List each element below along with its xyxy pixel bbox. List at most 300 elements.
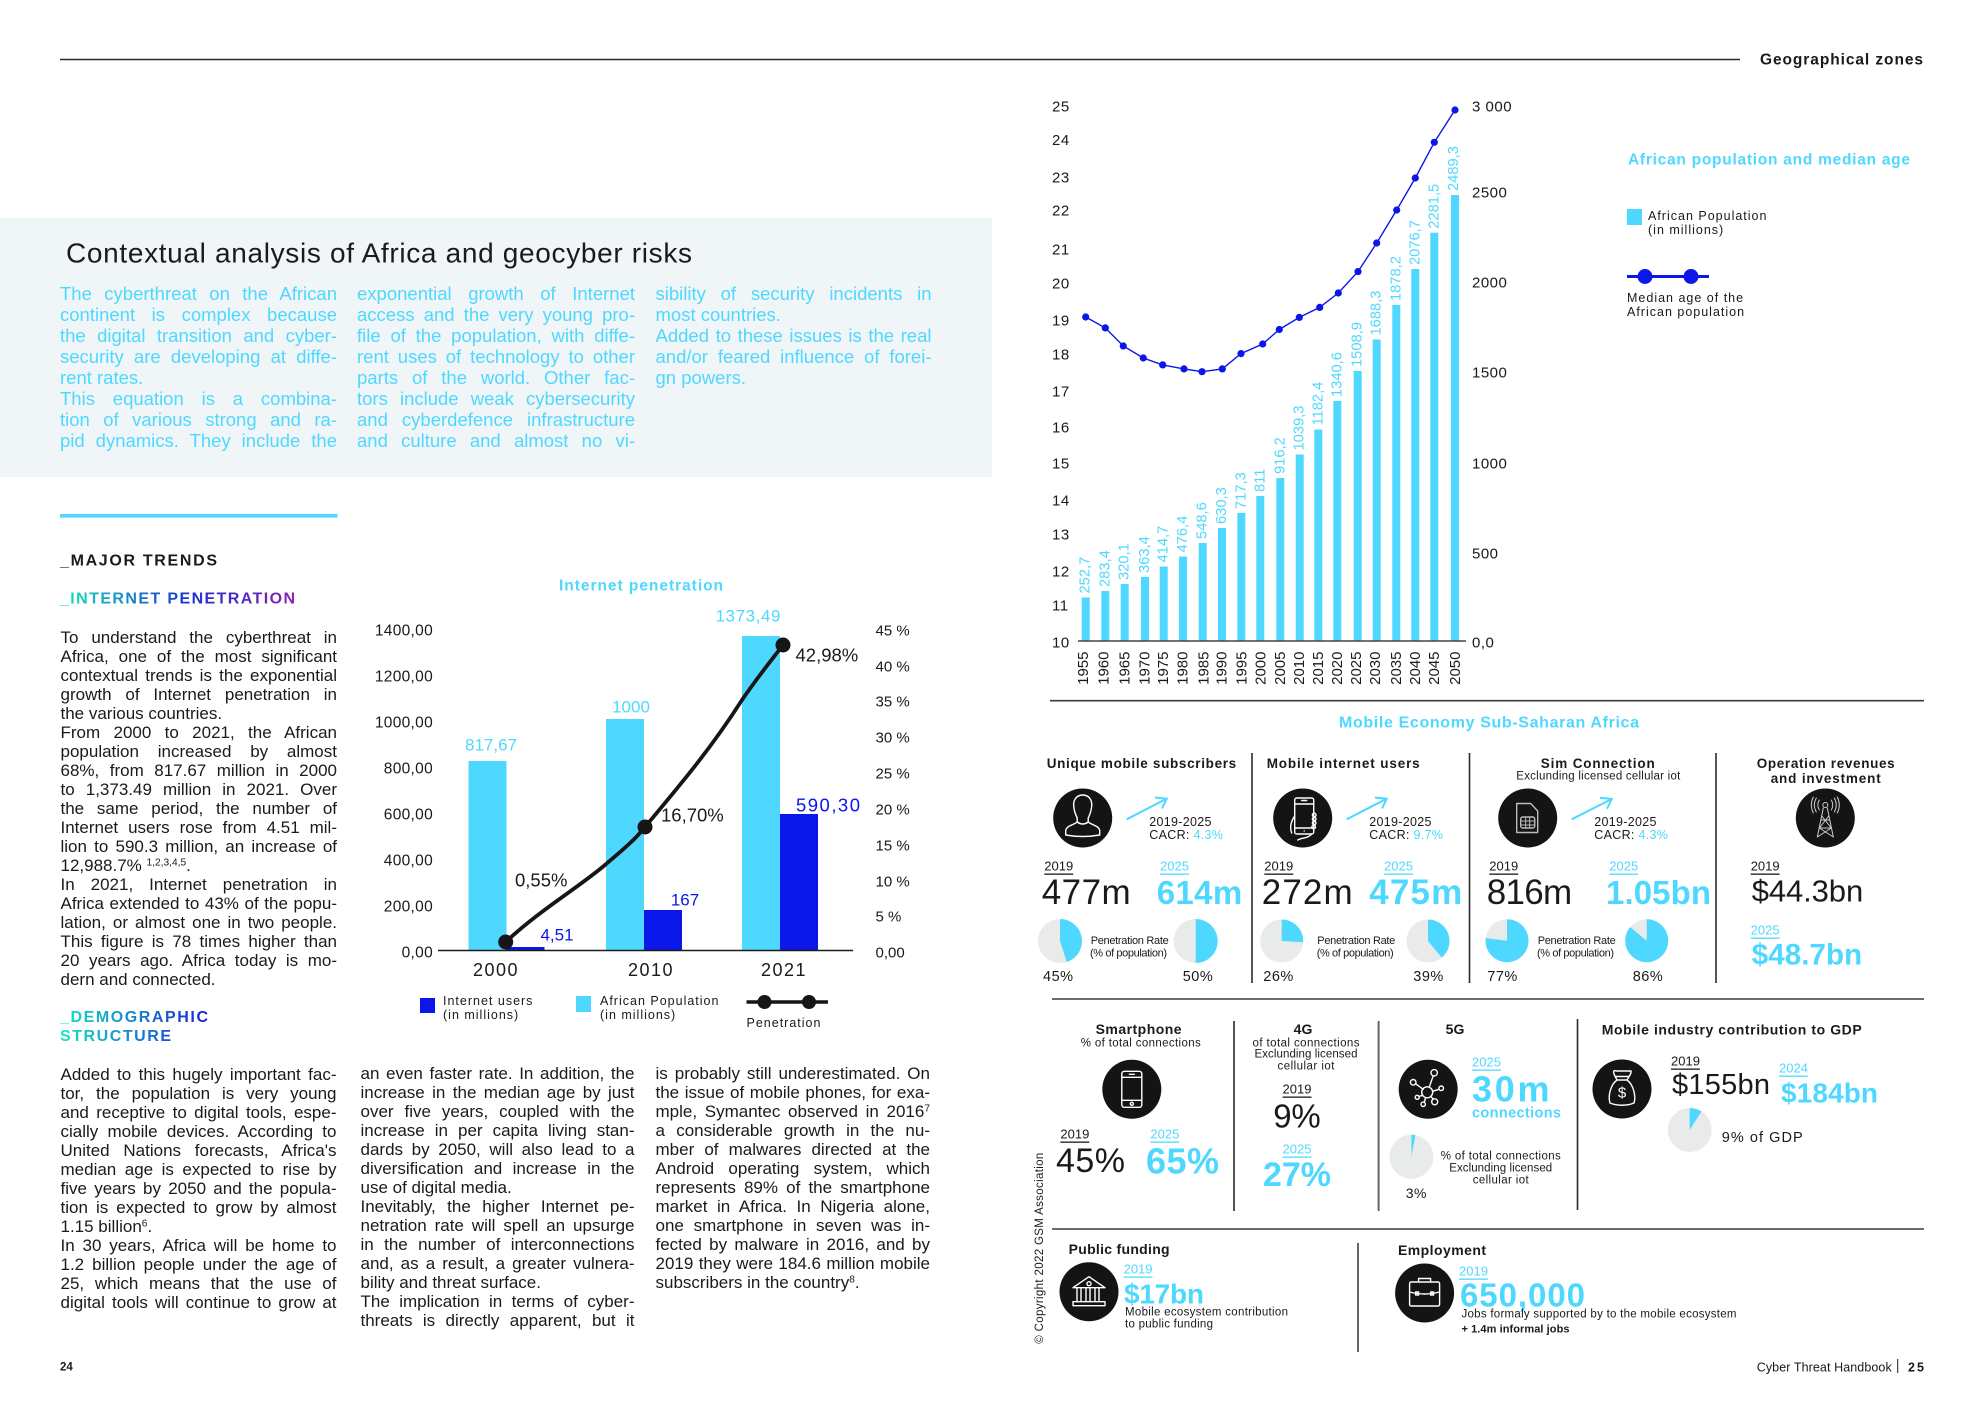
intro text column 2: rent uses of technology to other bbox=[357, 346, 635, 366]
right axis labels: 35 % bbox=[876, 694, 910, 710]
intro text column 2: tors include weak cybersecurity bbox=[357, 388, 635, 408]
panel: mobile internet users: (% of population) bbox=[1317, 948, 1394, 960]
text block: internet penetration: to 1,373.49 million in 2021. Over bbox=[60, 780, 337, 799]
legend bbox=[420, 994, 828, 1030]
footer: right page label: Cyber Threat Handbook bbox=[1757, 1361, 1892, 1375]
population value labels: 363,4 bbox=[1137, 536, 1153, 573]
chart legend: population and median age: African Population bbox=[1648, 209, 1767, 223]
panel: sim connection: (% of population) bbox=[1537, 948, 1614, 960]
panel: unique mobile subscribers: 477m bbox=[1042, 873, 1131, 912]
panel: public funding: Mobile ecosystem contribution bbox=[1125, 1306, 1288, 1318]
text block: demographic column 3: a considerable growth in the nu- bbox=[656, 1120, 930, 1140]
bar value labels: 1000 bbox=[612, 698, 650, 716]
left axis labels: 0,00 bbox=[402, 944, 433, 962]
population bars bbox=[1082, 195, 1459, 641]
year labels: 1955 bbox=[1075, 652, 1092, 685]
text block: demographic column 1: five years by 2050 and the popula- bbox=[60, 1179, 336, 1198]
left axis: median age: 16 bbox=[1052, 420, 1070, 436]
panel: 5G: % of total connections bbox=[1441, 1150, 1561, 1162]
text block: internet penetration: lation, or almost one in two people. bbox=[60, 913, 337, 932]
text block: demographic column 1: cially mobile devices. According to bbox=[60, 1122, 336, 1141]
year labels: 1995 bbox=[1234, 652, 1250, 685]
intro text column 1: pid dynamics. They include the bbox=[60, 430, 337, 450]
x axis labels bbox=[473, 960, 807, 980]
panel: sim connection: CACR: 4.3% bbox=[1594, 828, 1668, 842]
panel: 4G: 27% bbox=[1263, 1156, 1331, 1194]
section rules bbox=[1050, 701, 1924, 1229]
copyright: © Copyright 2022 GSM Association bbox=[1034, 1153, 1046, 1344]
bars: African population bbox=[468, 636, 780, 950]
panel: operation revenues and investment: 2019 bbox=[1751, 858, 1780, 874]
accent bar bbox=[60, 514, 338, 518]
chart legend: population and median age: Median age of the bbox=[1627, 291, 1744, 305]
panel: smartphone: % of total connections bbox=[1081, 1038, 1201, 1050]
pie: 77% bbox=[1486, 919, 1528, 962]
right axis: population: 0,0 bbox=[1472, 634, 1494, 652]
year labels: 1960 bbox=[1096, 652, 1112, 685]
x axis labels: 2000 bbox=[473, 960, 519, 980]
panel: mobile internet users: 475m bbox=[1369, 873, 1462, 912]
panel: mobile internet users: CACR: 9.7% bbox=[1369, 828, 1443, 842]
intro text column 3: Added to these issues is the real bbox=[656, 324, 932, 346]
panel: sim connection: Sim Connection bbox=[1541, 756, 1655, 771]
text block: demographic column 1 bbox=[60, 1065, 336, 1312]
x axis labels: 2021 bbox=[761, 960, 807, 980]
panel: mobile industry contribution to GDP: 2019 bbox=[1671, 1054, 1700, 1068]
heading: major trends: _MAJOR TRENDS bbox=[59, 552, 217, 570]
left axis: median age: 25 bbox=[1052, 98, 1070, 116]
chart legend: population and median age: African population bbox=[1627, 305, 1745, 319]
legend: (in millions) bbox=[443, 1008, 519, 1022]
text block: demographic column 3: subscribers in the country8. bbox=[656, 1272, 860, 1292]
panel: unique mobile subscribers: 45% bbox=[1043, 969, 1074, 985]
population value labels: 2281,5 bbox=[1426, 184, 1442, 229]
text block: demographic column 3: market in Africa. In Nigeria alone, bbox=[656, 1196, 930, 1216]
year labels: 2025 bbox=[1348, 652, 1365, 685]
panel: employment: 650,000 bbox=[1460, 1276, 1585, 1314]
text block: internet penetration: dern and connected. bbox=[60, 970, 216, 989]
panel: sim connection: 1.05bn bbox=[1606, 874, 1711, 911]
pie: 50% bbox=[1174, 919, 1218, 963]
axis baseline bbox=[1078, 640, 1466, 642]
panel: mobile internet users: Penetration Rate bbox=[1317, 935, 1395, 947]
bars: internet users bbox=[506, 814, 818, 950]
text block: demographic column 3: represents 89% of the smartphone bbox=[656, 1178, 930, 1196]
right axis: population: 2500 bbox=[1472, 184, 1507, 202]
panel: mobile internet users: Mobile internet users bbox=[1267, 756, 1420, 771]
left axis: median age: 20 bbox=[1052, 276, 1070, 292]
right axis labels: 5 % bbox=[876, 908, 901, 926]
year labels: 1965 bbox=[1116, 652, 1134, 685]
chart legend: population and median age bbox=[1627, 152, 1910, 319]
year labels: 1985 bbox=[1196, 652, 1212, 685]
panel: 5G: 3% bbox=[1406, 1185, 1427, 1201]
panel: smartphone: Smartphone bbox=[1096, 1021, 1182, 1037]
panel: 4G: Exclunding licensed bbox=[1254, 1048, 1358, 1060]
intro text column 2: exponential growth of Internet bbox=[357, 282, 635, 304]
chart: internet penetration bbox=[375, 578, 910, 1030]
panel: unique mobile subscribers: 2019 bbox=[1044, 858, 1073, 874]
intro text column 2: file of the population, with diffe- bbox=[357, 324, 635, 346]
panel: smartphone: 2019 bbox=[1060, 1126, 1089, 1142]
left axis labels: 1000,00 bbox=[375, 714, 433, 732]
right axis labels: 15 % bbox=[876, 838, 910, 854]
footer: left page number: 24 bbox=[60, 1362, 73, 1374]
text block: demographic column 3: mber of malwares directed at the bbox=[656, 1140, 930, 1158]
text block: internet penetration: population increased by almost bbox=[60, 742, 337, 761]
penetration labels bbox=[515, 644, 858, 890]
panel: unique mobile subscribers: 2019-2025 bbox=[1149, 815, 1212, 829]
heading: internet penetration: _INTERNET PENETRATION bbox=[59, 590, 295, 608]
intro text column 1: the digital transition and cyber- bbox=[60, 324, 337, 346]
text block: internet penetration: the various countries. bbox=[60, 704, 222, 723]
population value labels: 1878,2 bbox=[1388, 256, 1404, 301]
bar value labels bbox=[465, 606, 860, 944]
penetration labels: 42,98% bbox=[796, 644, 858, 666]
left axis: median age: 15 bbox=[1052, 456, 1070, 472]
year labels: 2000 bbox=[1252, 652, 1270, 685]
legend: Internet users bbox=[443, 994, 533, 1008]
text block: demographic column 2: diversification and increase in the bbox=[360, 1158, 634, 1178]
icon: cell tower bbox=[1796, 788, 1855, 848]
intro text column 3: most countries. bbox=[656, 304, 781, 324]
panel: mobile internet users: 272m bbox=[1262, 873, 1353, 912]
text block: internet penetration: Internet users rose from 4.51 mil- bbox=[60, 818, 337, 837]
right axis labels bbox=[876, 622, 910, 962]
year labels: 2035 bbox=[1388, 652, 1405, 685]
right axis: population: 2000 bbox=[1472, 274, 1507, 292]
population value labels: 2489,3 bbox=[1446, 146, 1462, 191]
panel: employment: 2019 bbox=[1459, 1264, 1488, 1278]
bar value labels: 4,51 bbox=[540, 926, 574, 944]
icon: bank bbox=[1060, 1262, 1118, 1321]
year labels: 1980 bbox=[1174, 652, 1192, 685]
panel: public funding: to public funding bbox=[1125, 1318, 1213, 1330]
text block: demographic column 3: fected by malware in 2016, and by bbox=[656, 1234, 930, 1254]
left axis: median age: 12 bbox=[1052, 564, 1070, 580]
text block: internet penetration: In 2021, Internet penetration in bbox=[60, 875, 337, 894]
axis baseline bbox=[438, 950, 853, 952]
panel: operation revenues and investment: $48.7bn bbox=[1752, 938, 1862, 972]
text block: demographic column 2: dards by 2050, will also lead to a bbox=[360, 1140, 634, 1158]
text block: internet penetration: To understand the cyberthreat in bbox=[60, 628, 337, 647]
intro text column 1: rent rates. bbox=[60, 366, 143, 388]
text block: internet penetration: Africa, one of the most significant bbox=[60, 647, 337, 666]
panel: operation revenues and investment bbox=[1751, 756, 1895, 972]
panel: 4G: cellular iot bbox=[1278, 1060, 1335, 1072]
text block: demographic column 2: use of digital media. bbox=[360, 1178, 512, 1196]
heading: demographic structure: _DEMOGRAPHIC bbox=[59, 1009, 208, 1026]
arrow: growth bbox=[1347, 798, 1387, 819]
penetration line bbox=[498, 638, 790, 950]
left axis: median age: 21 bbox=[1052, 242, 1070, 258]
population value labels: 1688,3 bbox=[1369, 291, 1385, 336]
year labels: 2005 bbox=[1272, 652, 1289, 685]
pie: 26% bbox=[1260, 920, 1303, 962]
intro text column 2 bbox=[357, 282, 635, 450]
left axis: median age: 18 bbox=[1052, 346, 1070, 364]
intro text column 1: tion of various strong and ra- bbox=[60, 408, 337, 430]
panel: mobile industry contribution to GDP: $184bn bbox=[1781, 1078, 1878, 1108]
year labels bbox=[1075, 652, 1464, 685]
text block: internet penetration: lion to 590.3 million, an increase of bbox=[60, 837, 337, 856]
population value labels: 811 bbox=[1252, 469, 1268, 492]
panel: unique mobile subscribers: (% of population) bbox=[1090, 948, 1167, 960]
left axis: median age: 22 bbox=[1052, 202, 1070, 220]
intro text column 1 bbox=[60, 282, 337, 451]
year labels: 1990 bbox=[1214, 652, 1230, 685]
text block: demographic column 3: is probably still underestimated. On bbox=[656, 1064, 930, 1082]
right axis: population: 500 bbox=[1472, 546, 1499, 562]
legend: Penetration bbox=[746, 1016, 821, 1030]
panel: mobile industry contribution to GDP: 2024 bbox=[1779, 1060, 1808, 1076]
heading: demographic structure: STRUCTURE bbox=[60, 1028, 171, 1045]
text block: internet penetration: growth of Internet penetration in bbox=[60, 685, 337, 704]
chart title: Internet penetration bbox=[559, 578, 723, 594]
population value labels: 414,7 bbox=[1156, 526, 1172, 562]
panel: smartphone: 65% bbox=[1146, 1140, 1219, 1182]
left axis: median age: 24 bbox=[1052, 132, 1070, 149]
panel: sim connection: 2019 bbox=[1489, 858, 1518, 874]
population value labels: 717,3 bbox=[1233, 472, 1249, 509]
population value labels: 252,7 bbox=[1078, 557, 1094, 594]
legend: African Population bbox=[600, 994, 719, 1008]
left axis: median age: 14 bbox=[1052, 492, 1070, 510]
left axis: median age bbox=[1052, 98, 1070, 652]
arrow: growth bbox=[1127, 798, 1167, 819]
panel: mobile internet users bbox=[1260, 756, 1462, 985]
panel: unique mobile subscribers bbox=[1038, 756, 1242, 985]
panel: mobile industry contribution to GDP: 9% of GDP bbox=[1722, 1130, 1803, 1146]
panel: sim connection: Penetration Rate bbox=[1538, 935, 1616, 947]
left axis: median age: 19 bbox=[1052, 312, 1070, 330]
panel: unique mobile subscribers: 614m bbox=[1157, 874, 1242, 911]
penetration labels: 16,70% bbox=[661, 804, 724, 826]
x axis labels: 2010 bbox=[628, 960, 674, 980]
panel: 5G bbox=[1389, 1021, 1561, 1201]
text block: internet penetration: From 2000 to 2021, the African bbox=[60, 723, 337, 742]
median age line bbox=[1082, 106, 1459, 375]
panel: 4G: 9% bbox=[1273, 1098, 1321, 1134]
panel: unique mobile subscribers: CACR: 4.3% bbox=[1149, 828, 1223, 842]
icon: network bbox=[1399, 1060, 1458, 1119]
text block: demographic column 2 bbox=[360, 1064, 634, 1330]
icon: smartphone bbox=[1102, 1060, 1161, 1119]
left axis: median age: 11 bbox=[1052, 598, 1069, 614]
intro text column 3 bbox=[656, 282, 932, 388]
panel: 4G: 2019 bbox=[1283, 1082, 1311, 1096]
text block: demographic column 1: 1.2 billion people under the age of bbox=[60, 1255, 336, 1274]
year labels: 2050 bbox=[1447, 652, 1464, 685]
left axis: median age: 10 bbox=[1052, 634, 1070, 652]
bar value labels: 167 bbox=[671, 890, 699, 910]
panel: operation revenues and investment: and investment bbox=[1771, 771, 1881, 786]
panel: 5G: cellular iot bbox=[1473, 1174, 1529, 1186]
population value labels: 2076,7 bbox=[1407, 220, 1423, 265]
icon: money bag: $ bbox=[1618, 1084, 1627, 1102]
population value labels: 1039,3 bbox=[1292, 406, 1308, 450]
text block: demographic column 2: The implication in terms of cyber- bbox=[360, 1292, 634, 1310]
population value labels: 1340,6 bbox=[1329, 352, 1345, 397]
panel: public funding: $17bn bbox=[1124, 1278, 1204, 1310]
population value labels: 548,6 bbox=[1195, 502, 1211, 539]
panel: employment: Jobs formaly supported by to the mobile ecosystem bbox=[1462, 1308, 1736, 1320]
panel: unique mobile subscribers: 50% bbox=[1183, 969, 1213, 985]
text block: demographic column 2: in the number of interconnections bbox=[360, 1234, 634, 1254]
right axis labels: 45 % bbox=[876, 622, 910, 640]
intro text column 3: sibility of security incidents in bbox=[656, 282, 932, 304]
panel: sim connection: 77% bbox=[1487, 969, 1518, 985]
pie: 9% bbox=[1668, 1108, 1712, 1152]
year labels: 2010 bbox=[1291, 652, 1308, 685]
bar value labels: 590,30 bbox=[796, 794, 860, 816]
text block: demographic column 2: increase in the median age by just bbox=[360, 1082, 634, 1102]
right axis labels: 25 % bbox=[876, 766, 910, 782]
population value labels bbox=[1078, 146, 1462, 594]
panel: unique mobile subscribers: Penetration Rate bbox=[1091, 935, 1169, 947]
panel: smartphone: 2025 bbox=[1150, 1126, 1179, 1142]
panel: smartphone bbox=[1056, 1021, 1219, 1182]
left axis: median age: 23 bbox=[1052, 170, 1070, 186]
panel: 5G: 5G bbox=[1446, 1021, 1464, 1037]
left axis labels: 200,00 bbox=[384, 898, 433, 916]
panel: smartphone: 45% bbox=[1056, 1142, 1125, 1180]
text block: internet penetration bbox=[60, 628, 337, 989]
panel: public funding: Public funding bbox=[1069, 1241, 1170, 1257]
panel: unique mobile subscribers: 2025 bbox=[1160, 858, 1189, 874]
year labels: 2030 bbox=[1367, 652, 1384, 685]
left axis labels: 800,00 bbox=[384, 760, 433, 778]
year labels: 2015 bbox=[1310, 652, 1327, 685]
chart legend: population and median age: (in millions) bbox=[1648, 223, 1724, 237]
left axis: median age: 17 bbox=[1052, 384, 1070, 400]
title: Contextual analysis of Africa and geocyber risks bbox=[66, 238, 692, 268]
right axis labels: 30 % bbox=[876, 730, 910, 746]
intro text column 3: and/or feared influence of forei- bbox=[656, 346, 932, 366]
text block: demographic column 2: bility and threat surface. bbox=[360, 1272, 541, 1292]
panel: mobile industry contribution to GDP: $155bn bbox=[1672, 1069, 1770, 1101]
text block: demographic column 1: United Nations forecasts, Africa's bbox=[60, 1141, 336, 1160]
panel: sim connection: 2025 bbox=[1609, 858, 1638, 874]
penetration labels: 0,55% bbox=[515, 870, 567, 890]
year labels: 1970 bbox=[1136, 652, 1154, 685]
panel: mobile internet users: 39% bbox=[1413, 969, 1444, 985]
arrow: growth bbox=[1572, 798, 1612, 819]
left axis labels: 400,00 bbox=[384, 852, 433, 870]
chart: African population and median age bbox=[1052, 98, 1512, 685]
icon: phone in hand bbox=[1273, 788, 1332, 848]
population value labels: 630,3 bbox=[1214, 487, 1230, 524]
text block: demographic column 1: median age is expected to rise by bbox=[60, 1160, 336, 1179]
text block: demographic column 1: Added to this hugely important fac- bbox=[60, 1065, 336, 1084]
year labels: 2040 bbox=[1407, 652, 1424, 685]
panel: mobile industry contribution to GDP: Mobile industry contribution to GDP bbox=[1602, 1022, 1862, 1038]
text block: internet penetration: the same period, the number of bbox=[60, 799, 337, 818]
panel: public funding bbox=[1060, 1241, 1288, 1330]
icon: briefcase bbox=[1395, 1264, 1454, 1322]
right axis: population bbox=[1472, 98, 1512, 652]
panel: operation revenues and investment: $44.3bn bbox=[1752, 874, 1863, 908]
panel: mobile internet users: 26% bbox=[1263, 969, 1294, 985]
heading: mobile economy: Mobile Economy Sub-Saharan Africa bbox=[1339, 714, 1639, 732]
header rule bbox=[60, 58, 1740, 60]
right axis: population: 1500 bbox=[1472, 364, 1507, 382]
text block: demographic column 2: over five years, coupled with the bbox=[360, 1102, 634, 1120]
panel: mobile internet users: 2019-2025 bbox=[1369, 815, 1432, 829]
panel: 5G: Exclunding licensed bbox=[1449, 1162, 1552, 1174]
panel: 4G: 2025 bbox=[1283, 1142, 1311, 1156]
pie: 39% bbox=[1406, 920, 1450, 962]
column dividers bbox=[1234, 753, 1716, 1352]
pie: 3% bbox=[1389, 1135, 1433, 1179]
intro text column 3: gn powers. bbox=[656, 366, 746, 388]
intro text column 1: security are developing at diffe- bbox=[60, 346, 337, 366]
panel: 4G bbox=[1252, 1021, 1360, 1194]
right axis: population: 1000 bbox=[1472, 456, 1507, 472]
icon: money bag bbox=[1592, 1060, 1652, 1118]
year labels: 2020 bbox=[1329, 652, 1346, 685]
panel: sim connection: 816m bbox=[1487, 873, 1572, 912]
text block: demographic column 3: Android operating system, which bbox=[656, 1158, 930, 1178]
intro text column 1: This equation is a combina- bbox=[60, 388, 337, 408]
left axis labels: 1400,00 bbox=[375, 622, 433, 640]
right axis labels: 10 % bbox=[876, 874, 910, 890]
panel: employment bbox=[1395, 1242, 1736, 1336]
panel: 5G: 2025 bbox=[1472, 1054, 1501, 1070]
section label: geographical zones: Geographical zones bbox=[1760, 52, 1923, 68]
icon: sim card bbox=[1498, 788, 1557, 848]
text block: demographic column 3 bbox=[656, 1064, 930, 1292]
text block: demographic column 2: increase in per capita living stan- bbox=[360, 1120, 634, 1140]
panel: employment: Employment bbox=[1398, 1242, 1486, 1258]
text block: demographic column 2: an even faster rate. In addition, the bbox=[360, 1064, 634, 1082]
intro text column 1: The cyberthreat on the African bbox=[60, 282, 337, 304]
panel: unique mobile subscribers: Unique mobile subscribers bbox=[1047, 756, 1236, 771]
intro text column 2: parts of the world. Other fac- bbox=[357, 366, 635, 388]
text block: demographic column 1: tion is expected to grow by almost bbox=[60, 1198, 336, 1217]
panel: 4G: 4G bbox=[1294, 1021, 1312, 1037]
panel: sim connection: Exclunding licensed cellular iot bbox=[1516, 770, 1681, 782]
text block: internet penetration: contextual trends is the exponential bbox=[60, 666, 337, 685]
panel: 5G: connections bbox=[1472, 1106, 1561, 1122]
intro text column 2: access and the very young pro- bbox=[357, 304, 635, 324]
right axis labels: 0,00 bbox=[876, 944, 905, 962]
panel: intro background bbox=[0, 218, 992, 477]
text block: demographic column 3: one smartphone in seven was in- bbox=[656, 1216, 930, 1234]
text block: demographic column 2: and, as a result, a greater vulnera- bbox=[360, 1254, 634, 1272]
right axis labels: 20 % bbox=[876, 802, 910, 818]
legend: (in millions) bbox=[600, 1008, 676, 1022]
text block: internet penetration: 68%, from 817.67 million in 2000 bbox=[60, 761, 337, 780]
text block: demographic column 2: netration rate will spell an upsurge bbox=[360, 1216, 634, 1234]
footer: right page label: 25 bbox=[1908, 1361, 1924, 1375]
panel: mobile internet users: 2025 bbox=[1384, 858, 1413, 874]
population value labels: 916,2 bbox=[1272, 437, 1288, 474]
text block: demographic column 1: 25, which means that the use of bbox=[60, 1274, 336, 1293]
panel: operation revenues and investment: Operation revenues bbox=[1757, 756, 1895, 771]
left axis labels bbox=[375, 622, 433, 962]
text block: internet penetration: 12,988.7% 1,2,3,4,5. bbox=[60, 856, 191, 875]
text block: demographic column 2: Inevitably, the higher Internet pe- bbox=[360, 1196, 634, 1216]
text block: demographic column 1: tor, the population is very young bbox=[60, 1084, 336, 1103]
left axis labels: 600,00 bbox=[384, 806, 433, 824]
chart legend: population and median age: African population and median age bbox=[1628, 152, 1910, 168]
panel: 5G: 30m bbox=[1472, 1068, 1550, 1110]
text block: internet penetration: 20 years ago. Africa today is mo- bbox=[60, 951, 337, 970]
text block: internet penetration: Africa extended to 43% of the popu- bbox=[60, 894, 337, 913]
text block: demographic column 3: 2019 they were 184.6 million mobile bbox=[656, 1254, 930, 1272]
text block: demographic column 3: the issue of mobile phones, for exa- bbox=[656, 1082, 930, 1102]
